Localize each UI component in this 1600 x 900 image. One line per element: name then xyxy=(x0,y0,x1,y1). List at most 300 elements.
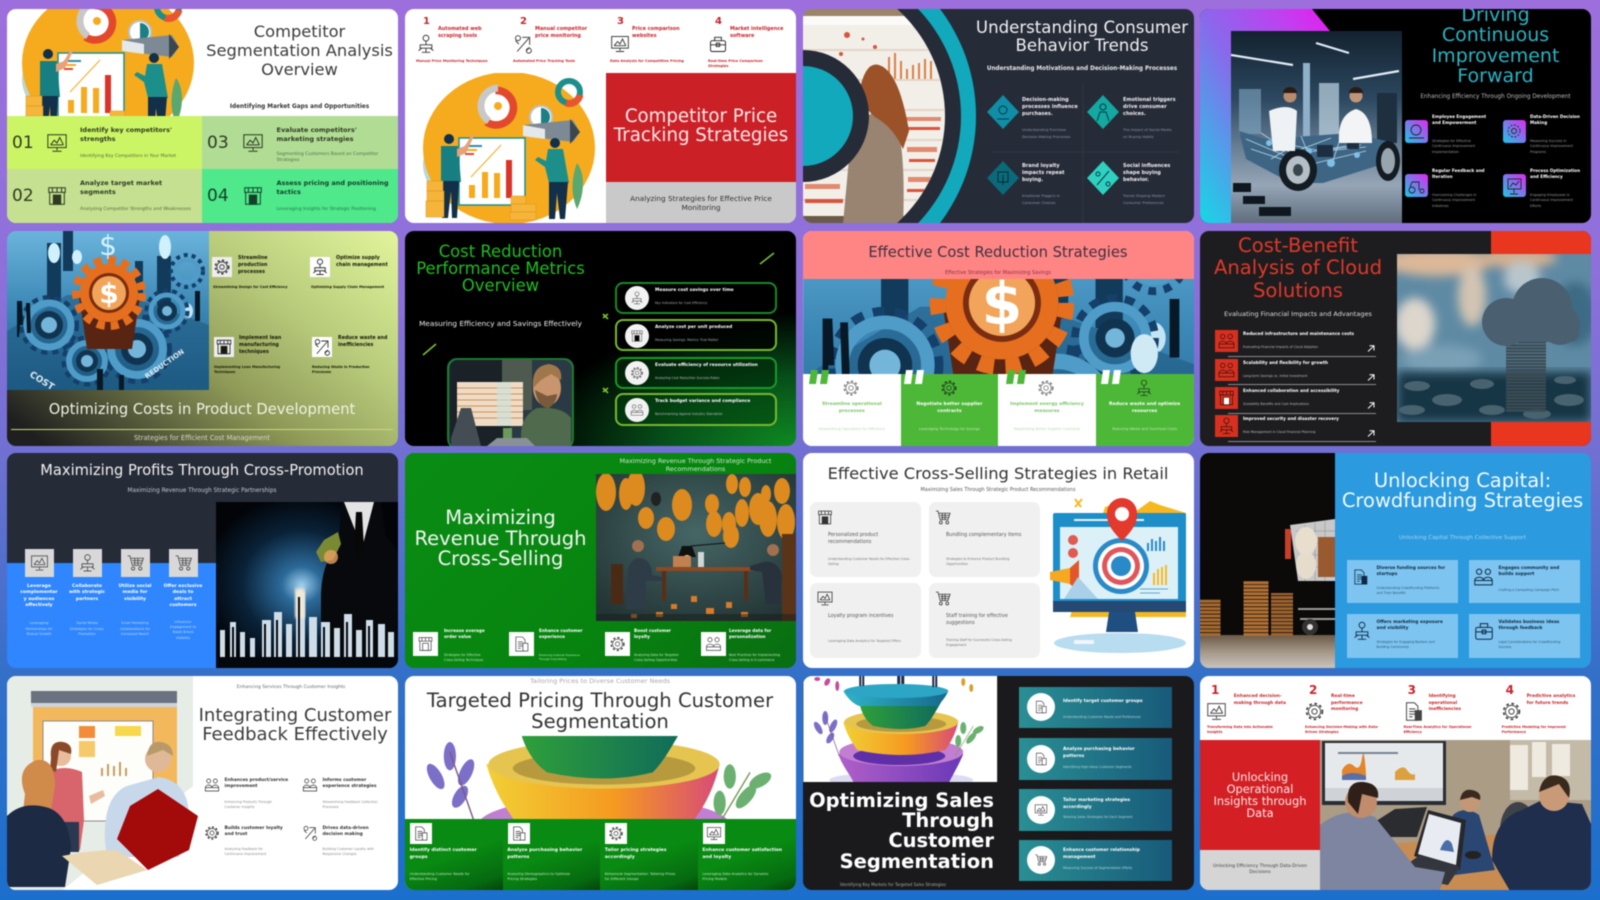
item: supply chain xyxy=(309,254,388,290)
item: data-driven: Continuous Improvement xyxy=(1530,144,1573,148)
arrow xyxy=(1367,345,1375,352)
subtitle: Measuring Efficiency and Savings Effectively xyxy=(419,319,582,328)
pink header band xyxy=(803,231,1194,279)
item: process optimization: Process Optimization xyxy=(1530,168,1580,172)
heading: Revenue Through xyxy=(414,526,586,550)
red title panel: Competitor Price xyxy=(625,106,777,127)
item: product improvement: Customer Insights xyxy=(224,805,254,809)
heading xyxy=(1432,8,1560,87)
tile 02: segments xyxy=(80,188,116,196)
illustration: gears with dollar sign: $ xyxy=(99,277,119,310)
card: funding sources xyxy=(1347,560,1458,603)
item: decision-making: purchases. xyxy=(1022,111,1053,117)
tile 03: Evaluate competitors' xyxy=(276,126,357,134)
divider and subtitle xyxy=(11,429,393,446)
segment card 4 xyxy=(1019,840,1172,880)
heading: Crowdfunding Strategies xyxy=(1342,489,1583,512)
quotation accents xyxy=(803,369,1194,387)
step 2: Analyze purchasing behavior xyxy=(507,848,582,853)
metric card: cost savings: Key Indicators for Cost Efficiency xyxy=(655,301,707,305)
tile 02: Analyze target market xyxy=(80,178,162,186)
icon: white circle xyxy=(625,286,649,310)
heading: Integrating Customer xyxy=(199,705,391,726)
item: brand loyalty: Emotional Triggers in xyxy=(1022,194,1060,198)
segment card 3: Tailor marketing strategies xyxy=(1063,798,1130,802)
strategy column 3 xyxy=(998,374,1096,446)
gradient accent band xyxy=(1199,8,1330,224)
red title panel: Unlocking xyxy=(1232,770,1288,784)
item: lean manufacturing xyxy=(214,335,307,377)
card: bundling items: Opportunities xyxy=(946,562,968,566)
heading xyxy=(193,706,397,744)
metric card: cost per unit xyxy=(615,319,777,351)
item: real-time monitoring xyxy=(1303,676,1398,738)
icon: white circle xyxy=(1027,796,1055,824)
item: operational inefficiencies: Efficiency xyxy=(1404,730,1422,734)
illustration: team around a whiteboard with red hexagon xyxy=(7,676,205,890)
item: complementary audiences: Leverage xyxy=(27,584,51,589)
item: employee engagement: Strategies for Effective xyxy=(1432,138,1471,142)
photo: engineers working on a car chassis xyxy=(1230,30,1403,224)
pink header band: Effective Strategies for Maximizing Savings xyxy=(945,270,1051,276)
benefit row 1: Evaluating Financial Impacts of Cloud Adoption xyxy=(1243,345,1318,349)
icon: document calculator xyxy=(1402,700,1425,722)
heading: Targeted Pricing Through Customer xyxy=(427,689,773,712)
heading: Analysis of Cloud xyxy=(1214,256,1382,279)
item: streamline production: processes xyxy=(238,270,265,275)
icon: white circle xyxy=(625,361,649,385)
card: staff training: suggestions xyxy=(946,621,975,626)
icon: grey tile xyxy=(168,549,198,577)
item: web scraping tools: scraping tools xyxy=(438,32,477,38)
card: community: Crafting a Compelling Campaign Pitch xyxy=(1498,588,1559,592)
icon: briefcase xyxy=(1473,619,1495,643)
item: manual monitoring: Manual competitor xyxy=(535,26,587,32)
card: community: builds support xyxy=(1498,572,1534,577)
photo: woman at store shelves inside arcs xyxy=(802,8,977,224)
item: complementary audiences: Leveraging xyxy=(30,621,48,625)
segment card 2: patterns xyxy=(1063,754,1084,758)
illustration: business analysts xyxy=(422,72,596,224)
segment card 4: management xyxy=(1063,854,1096,860)
panel: Maximizing Revenue Through Cross-Selling xyxy=(405,453,796,668)
photo: team reviewing dashboards in a meeting room xyxy=(1320,740,1590,890)
item: customer loyalty: Boost customer xyxy=(634,628,671,633)
red title panel xyxy=(606,72,796,182)
item: complementary audiences: Partnerships for xyxy=(26,626,52,630)
strategy column 1: Streamlining Operations for Efficiency xyxy=(819,427,885,431)
card: staff training: Engagement xyxy=(946,643,966,647)
item: data-driven: Data-Driven Decision xyxy=(1530,114,1580,118)
item: data-driven: Programs xyxy=(1530,150,1546,154)
item: decision-making: processes influence xyxy=(1022,104,1078,110)
icon: gear head xyxy=(1037,379,1055,397)
red accent blocks xyxy=(1491,231,1591,446)
card: validates ideas: Success xyxy=(1498,645,1511,649)
segment card 3 xyxy=(1019,788,1172,830)
tile 04: 04 xyxy=(207,186,229,206)
panel: Understanding Consumer Behavior Trends xyxy=(803,8,1194,223)
item: market intelligence: Real-time Price Comparison xyxy=(708,58,763,62)
grey subtitle panel: Decisions xyxy=(1249,870,1271,874)
benefit row 4: Improved security and disaster recovery xyxy=(1243,416,1339,421)
icon: shop xyxy=(244,186,262,206)
step 3: Behavioral Segmentation: Tailoring Prices xyxy=(605,872,675,876)
strategy column 2: contracts xyxy=(937,408,962,414)
item: exclusive deals: customers xyxy=(170,603,196,608)
item: product improvement: Enhancing Products Through xyxy=(224,800,272,804)
icon xyxy=(410,822,432,844)
item: emotional triggers: Emotional triggers xyxy=(1123,97,1176,103)
grey subtitle panel: Analyzing Strategies for Effective Price xyxy=(630,194,772,202)
icon: gradient tile xyxy=(1404,173,1429,198)
photo: man with laptop and spreadsheet xyxy=(447,358,574,446)
item: lean manufacturing: Implement lean xyxy=(239,336,281,341)
metric card: budget variance: Benchmarking Against Industry Standards xyxy=(655,412,722,416)
item: emotional triggers: drive consumer xyxy=(1123,104,1167,110)
icon: gradient tile xyxy=(1404,119,1429,144)
photo: meeting beneath orange balloons xyxy=(596,474,796,621)
item: social influences: Social influences xyxy=(1123,163,1170,169)
item: manual monitoring: 2 xyxy=(520,16,527,26)
card: validates ideas: Validates business ideas xyxy=(1498,620,1559,625)
item: market intelligence: Market intelligence xyxy=(730,26,783,32)
card: validates ideas: Legal Considerations for Crowdfunding xyxy=(1498,640,1560,644)
card: marketing exposure xyxy=(1347,614,1458,658)
segment card 2 xyxy=(1019,738,1172,780)
item: experience strategies: Processes xyxy=(322,805,339,809)
heading: Segmentation xyxy=(840,850,994,873)
item: decision-making: Understanding Purchase xyxy=(1022,128,1066,132)
card: funding sources: Diverse funding sources for xyxy=(1376,566,1445,571)
icon: chess piece xyxy=(1135,379,1153,397)
icon: white circle xyxy=(625,324,649,348)
item: product improvement: Enhances product/service xyxy=(224,778,288,782)
strategy column 4: resources xyxy=(1132,408,1157,414)
item: regular feedback: Initiatives xyxy=(1432,204,1449,208)
segment card 2: Identifying High-Value Customer Segments xyxy=(1063,764,1132,768)
item: real-time monitoring: performance xyxy=(1331,700,1363,706)
icon: community xyxy=(1473,565,1494,589)
item: predictive analytics: for future trends xyxy=(1527,700,1568,706)
icon: gradient tile xyxy=(1502,119,1527,144)
card: funding sources: and Their Benefits xyxy=(1376,591,1406,595)
heading: Feedback Effectively xyxy=(202,724,388,745)
item: loyalty and trust: and trust xyxy=(224,832,247,837)
icon: dashboard xyxy=(1205,700,1228,722)
icon: diamond xyxy=(1086,160,1120,196)
metric card: resource utilization: Analyzing Cost Reduction Success Rates xyxy=(655,376,719,380)
item: process optimization: Efforts xyxy=(1530,204,1541,208)
item: loyalty and trust: Continuous Improvement xyxy=(224,852,266,856)
item: customer loyalty: Analyzing Data for Targeted xyxy=(634,652,678,656)
tile 04: Assess pricing and positioning xyxy=(276,178,388,186)
icon: white tile xyxy=(701,632,726,656)
item: lean manufacturing: manufacturing xyxy=(239,343,279,348)
card: loyalty program xyxy=(810,583,921,658)
item: operational inefficiencies: Real-Time Analytics for Operational xyxy=(1404,725,1471,729)
heading: Solutions xyxy=(1253,279,1343,302)
item: data-driven decisions: Building Customer Loyalty with xyxy=(322,847,374,851)
segment card 1 xyxy=(1019,686,1172,728)
item: lean manufacturing: Techniques xyxy=(214,370,235,374)
benefit row 1 xyxy=(1215,330,1376,357)
item: exclusive deals: Visibility xyxy=(176,636,190,640)
step 1: groups xyxy=(410,855,428,860)
divider and subtitle: Strategies for Efficient Cost Management xyxy=(134,434,270,442)
heading: Overview xyxy=(462,276,539,295)
illustration: monitor with target and location pin xyxy=(1050,497,1188,657)
item: social influences: shape buying xyxy=(1123,170,1161,176)
icon: dollar book xyxy=(1352,565,1369,589)
item: operational inefficiencies: inefficiencies xyxy=(1429,707,1461,712)
strategy column 2 xyxy=(901,374,998,446)
card: personalized recommendations: Selling xyxy=(828,562,839,566)
tile 04: Leveraging Insights for Strategic Positioning xyxy=(276,206,376,212)
item: price comparison: Price comparison xyxy=(632,26,680,32)
item: manual monitoring xyxy=(512,16,588,64)
dividers xyxy=(1082,151,1084,153)
strategy column 2: Negotiate better supplier xyxy=(916,402,982,406)
top subtitle: Enhancing Services Through Customer Insights xyxy=(237,685,345,690)
heading: Optimizing Costs in Product Development xyxy=(49,400,355,418)
item: web scraping tools: 1 xyxy=(423,16,430,26)
item: employee engagement: Employee Engagement xyxy=(1432,114,1486,118)
subtitle: Maximizing Sales Through Strategic Product Recommendations xyxy=(920,487,1076,493)
item: product improvement xyxy=(204,776,299,812)
item: regular feedback: Iteration xyxy=(1432,174,1453,178)
item: emotional triggers: choices. xyxy=(1123,111,1146,117)
tile 01: Identify key competitors' xyxy=(80,126,172,134)
benefit row 2: Scalability and flexibility for growth xyxy=(1243,360,1328,364)
item: employee engagement: Implementation xyxy=(1432,150,1459,154)
benefit row 2 xyxy=(1215,358,1376,386)
item: real-time monitoring: Driven Strategies xyxy=(1305,730,1339,734)
strategy column 4 xyxy=(1096,374,1194,446)
panel: Cost Reduction Performance Metrics Overview xyxy=(405,231,796,446)
item: strategic partners: with strategic xyxy=(69,590,105,595)
metric card: resource utilization xyxy=(615,357,777,388)
heading: Cross-Selling xyxy=(438,547,563,570)
item: operational inefficiencies: operational xyxy=(1429,700,1457,706)
item: exclusive deals: Boost Brand xyxy=(173,630,193,634)
segment card 3: accordingly xyxy=(1063,804,1092,810)
icon: grey tile xyxy=(120,549,150,577)
item: process optimization: and Efficiency xyxy=(1530,174,1563,178)
tile 02: Analyzing Competitor Strengths and Weaknesses xyxy=(80,206,191,212)
tile 03: 03 xyxy=(207,132,229,152)
strategy column 1: processes xyxy=(839,408,865,414)
item: predictive analytics xyxy=(1500,676,1590,738)
item: social media: media for xyxy=(123,590,147,595)
icon xyxy=(508,822,530,844)
step 4 xyxy=(698,818,796,890)
item: enhanced decision-making: Insights xyxy=(1207,730,1222,734)
metric card: cost per unit: Measuring Savings: Metrics That Matter xyxy=(655,338,718,342)
heading: Forward xyxy=(1457,65,1534,87)
heading: Continuous xyxy=(1442,24,1549,46)
item: personalization: Best Practices for Implementing xyxy=(729,652,780,656)
item: emotional triggers xyxy=(1086,94,1176,139)
item: social influences: Consumer Preferences xyxy=(1123,200,1164,204)
item: social influences: behavior. xyxy=(1123,177,1149,183)
panel: Maximizing Profits Through Cross-Promotion xyxy=(7,453,398,668)
icon: monitor xyxy=(46,134,68,152)
top subtitle xyxy=(596,457,795,473)
icon: white tile xyxy=(413,632,438,656)
item: experience strategies: Streamlining Feedback Collection xyxy=(322,800,378,804)
item: price comparison xyxy=(610,16,684,64)
item: brand loyalty: Brand loyalty xyxy=(1022,163,1060,169)
heading xyxy=(405,690,795,732)
tile 04: tactics xyxy=(276,188,301,196)
strategy column 3: Implement energy efficiency xyxy=(1010,402,1084,406)
item: complementary audiences: Mutual Growth xyxy=(27,632,51,636)
item: reduce waste: Processes xyxy=(312,370,331,374)
item: exclusive deals: Engagement to xyxy=(170,625,196,629)
metric card: cost per unit: Analyze cost per unit produced xyxy=(655,325,732,330)
step 1: Understanding Customer Needs for xyxy=(410,872,470,876)
item: brand loyalty xyxy=(986,161,1065,204)
red title panel: Insights through xyxy=(1214,794,1306,808)
step 4: Leveraging Data Analytics for Dynamic xyxy=(702,872,769,876)
item: process optimization: Continuous Improvement xyxy=(1530,198,1573,202)
heading: Effective Cross-Selling Strategies in Retail xyxy=(828,464,1168,483)
strategy column 1 xyxy=(803,374,901,446)
subtitle: Identifying Market Gaps and Opportunities xyxy=(230,104,369,110)
benefit row 4 xyxy=(1215,415,1376,442)
icon: gear head xyxy=(1500,700,1523,722)
tile 01: strengths xyxy=(80,134,115,142)
grey subtitle panel xyxy=(606,182,796,224)
icon: tools xyxy=(418,34,434,54)
icon: grey tile xyxy=(24,549,54,577)
item: predictive analytics: Performance xyxy=(1502,730,1526,734)
item: customer experience xyxy=(509,628,601,666)
item: data-driven decisions: Responsive Changes xyxy=(322,852,357,856)
illustration: gears with dollar sign xyxy=(6,230,210,391)
item: average order value xyxy=(413,628,505,666)
benefit row 3: Enhanced collaboration and accessibility xyxy=(1243,388,1339,393)
dark header block: Maximizing Profits Through Cross-Promotion xyxy=(40,462,364,478)
item: average order value: Cross-Selling Techniques xyxy=(444,658,483,662)
item: exclusive deals: Offer exclusive xyxy=(164,584,202,589)
heading: Segmentation xyxy=(531,710,669,733)
heading: Customer xyxy=(888,829,994,852)
panel: Effective Cost Reduction Strategies xyxy=(803,231,1194,446)
item: average order value: Increase average xyxy=(444,628,485,633)
item: customer loyalty: loyalty xyxy=(634,634,650,639)
card: marketing exposure: Offers marketing exposure xyxy=(1376,620,1443,625)
icon xyxy=(310,257,330,277)
step 4: and loyalty xyxy=(702,855,731,860)
segment card 2: Analyze purchasing behavior xyxy=(1063,746,1135,752)
item: web scraping tools: Manual Price Monitoring Techniques xyxy=(416,58,488,62)
tile 01 xyxy=(7,116,202,168)
benefit row 3: Scalability Benefits and Cost Implications xyxy=(1243,402,1309,406)
panel: Unlocking Operational Insights through Data xyxy=(1200,676,1590,890)
item: experience strategies xyxy=(302,776,397,812)
step 1: Effective Pricing xyxy=(410,877,437,881)
card: staff training xyxy=(929,583,1040,658)
panel: Targeted Pricing Through Customer Segmentation xyxy=(405,676,796,890)
red title panel: Data xyxy=(1246,806,1274,820)
item: average order value: order value xyxy=(444,634,471,639)
item: strategic partners: Strategies for Cross- xyxy=(70,626,104,630)
item: data-driven: Measuring Success in xyxy=(1530,138,1567,142)
item: emotional triggers: The Impact of Social Media xyxy=(1123,128,1172,132)
item: enhanced decision-making: 1 xyxy=(1211,682,1219,696)
arrow xyxy=(1367,430,1375,437)
step 2: Analyzing Demographics to Optimize xyxy=(507,872,570,876)
illustration: business analysts with chart and telescope xyxy=(21,8,195,117)
pink header band: Effective Cost Reduction Strategies xyxy=(868,244,1128,260)
tile 03: marketing strategies xyxy=(276,134,354,142)
item: regular feedback: Regular Feedback and xyxy=(1432,168,1485,172)
card: personalized recommendations: Personalized product xyxy=(828,533,878,538)
item: exclusive deals: deals to xyxy=(173,590,193,595)
item: social media: Utilize social xyxy=(119,584,151,589)
item: market intelligence: Strategies xyxy=(708,64,728,68)
item: price comparison: websites xyxy=(632,32,656,38)
card: validates ideas: through feedback xyxy=(1498,626,1542,631)
icon: gear xyxy=(1303,700,1326,722)
item: employee engagement: and Empowerment xyxy=(1432,120,1476,124)
card: community xyxy=(1469,560,1580,603)
tile 02 xyxy=(7,168,202,223)
card: loyalty program: Leveraging Data Analytics for Targeted Offers xyxy=(828,639,901,643)
item: complementary audiences: complementar xyxy=(20,590,58,595)
icon: shop xyxy=(815,509,835,526)
item: regular feedback xyxy=(1404,168,1485,208)
card: bundling items: Bundling complementary items xyxy=(946,533,1021,538)
item: loyalty and trust xyxy=(204,824,299,860)
item: streamline production: Streamlining Design for Cost Efficiency xyxy=(213,285,288,289)
item: personalization xyxy=(701,628,795,666)
item: decision-making xyxy=(986,94,1078,139)
panel: Competitor Segmentation Analysis Overview xyxy=(7,8,398,223)
heading xyxy=(976,18,1189,54)
item: average order value: Strategies for Effective xyxy=(444,652,481,656)
item: streamline production: production xyxy=(238,263,267,268)
heading xyxy=(1335,471,1590,511)
icon: monitor xyxy=(815,590,835,607)
tile 03 xyxy=(202,116,398,168)
metric card: budget variance xyxy=(615,393,777,426)
item: employee engagement xyxy=(1404,114,1487,154)
heading: Optimizing Sales xyxy=(809,788,994,812)
item: supply chain: chain management xyxy=(336,263,388,268)
item: complementary audiences xyxy=(16,549,62,649)
item: loyalty and trust: Builds customer loyalty xyxy=(224,826,283,830)
icon: diamond xyxy=(1086,94,1120,130)
metric card: resource utilization: Evaluate efficiency of resource utilization xyxy=(655,363,758,368)
icon: monitor xyxy=(610,35,630,53)
icon: diamond xyxy=(986,161,1020,195)
icon: red tile xyxy=(1215,387,1238,409)
item: price comparison: Data Analysis for Competitive Pricing xyxy=(610,58,684,62)
item: process optimization xyxy=(1502,168,1581,208)
item: reduce waste: inefficiencies xyxy=(338,343,373,348)
tile 03: Strategies xyxy=(276,158,299,162)
item: data-driven decisions: Drives data-driven xyxy=(322,826,369,830)
illustration: segmentation funnel xyxy=(405,736,796,818)
card: personalized recommendations: recommendations xyxy=(828,540,871,545)
item: social media: Email Marketing xyxy=(121,621,149,625)
item: customer loyalty: Cross-Selling Opportunities xyxy=(634,658,677,662)
item: predictive analytics: Predictive Modeling for Improved xyxy=(1502,725,1566,729)
item: supply chain: Optimize supply xyxy=(336,256,380,261)
